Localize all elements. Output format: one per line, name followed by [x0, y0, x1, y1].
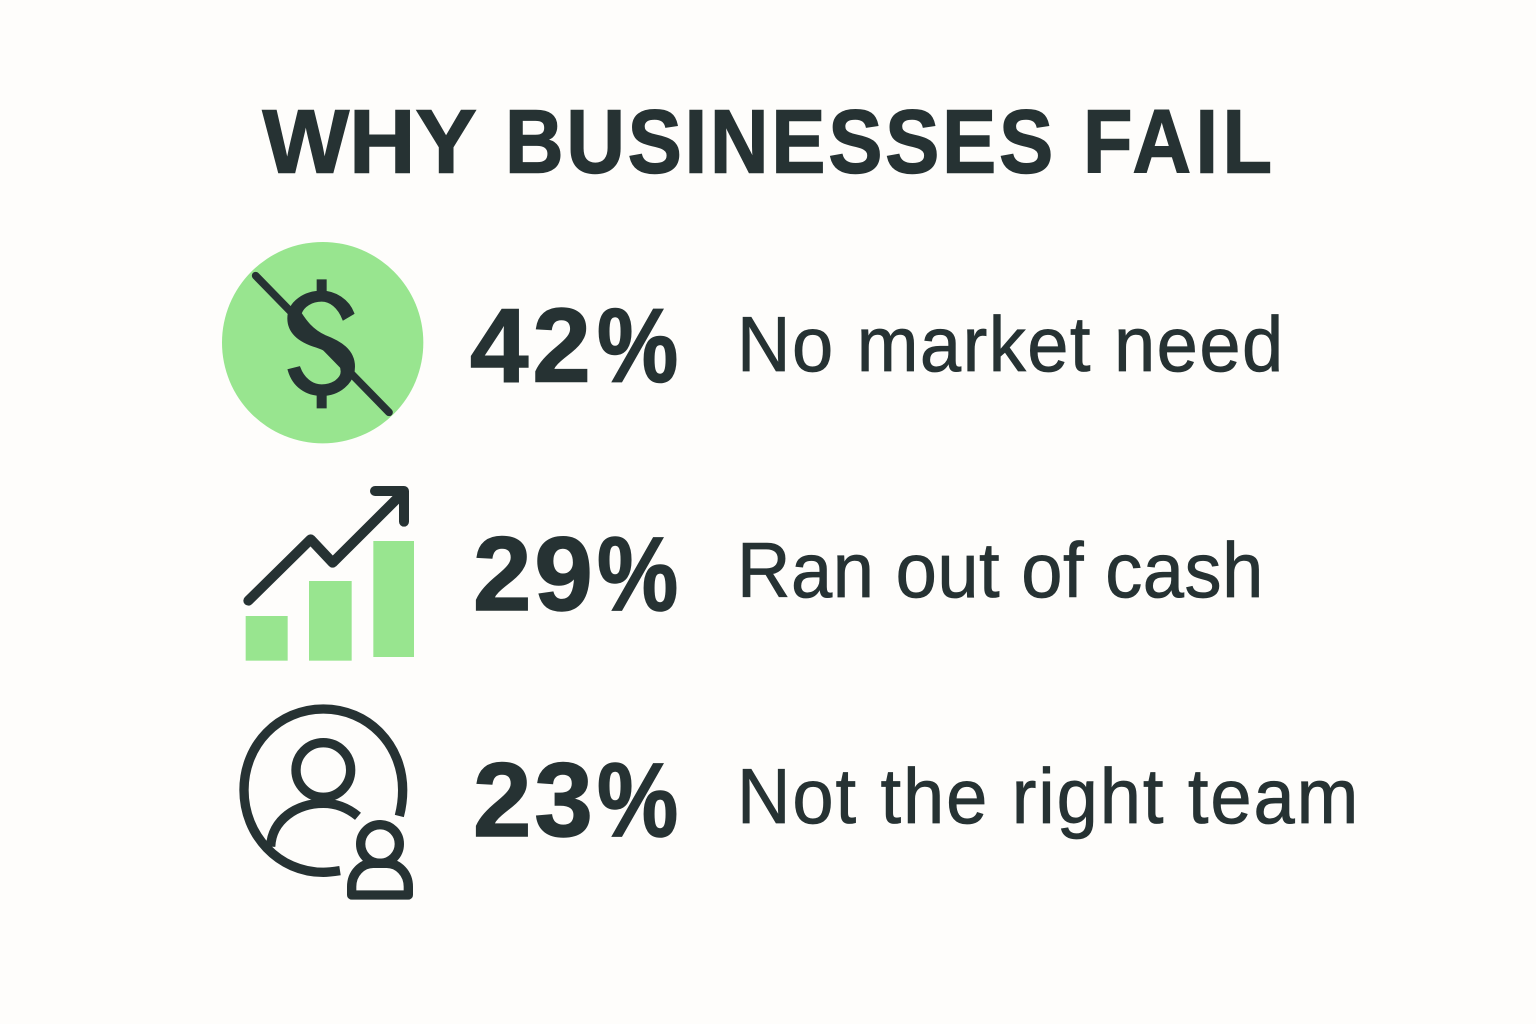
title [262, 92, 1272, 192]
title: FAIL [1083, 92, 1272, 192]
title: WHY [262, 92, 477, 192]
icon: growth chart with arrow [246, 491, 414, 661]
stat: 29% [473, 515, 678, 633]
label: not the right team: Not the right team [737, 753, 1358, 840]
title: BUSINESSES [505, 92, 1053, 192]
stat: 29%: % [597, 515, 678, 632]
stat: 23% [473, 741, 678, 859]
stat: 23%: % [597, 741, 678, 858]
stat: 42% [470, 287, 678, 404]
stat: 42%: % [597, 287, 678, 404]
row: no market need [222, 242, 1283, 443]
stat: 42%: 42 [470, 288, 595, 404]
label: ran out of cash: Ran out of cash [737, 527, 1263, 614]
icon: team people [244, 709, 408, 895]
label: no market need: No market need [737, 301, 1283, 388]
stat: 29%: 29 [473, 516, 596, 633]
row: not the right team [244, 709, 1358, 895]
stat: 23%: 23 [473, 742, 596, 859]
icon: crossed-out dollar [222, 242, 423, 443]
row: ran out of cash [246, 491, 1263, 661]
